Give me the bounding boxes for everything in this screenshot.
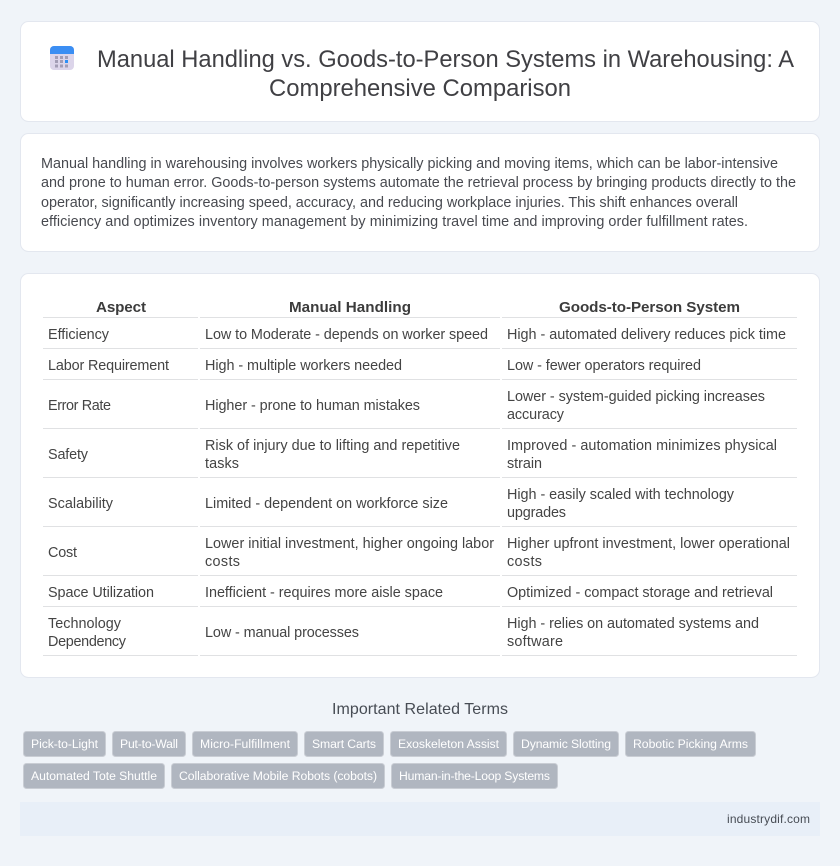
intro text: and prone to human error. Goods-to-person systems automate the retrieval process by bringing products directly to the xyxy=(41,175,796,191)
row: space utilization: Inefficient - requires more aisle space xyxy=(205,585,443,601)
row: technology dependency xyxy=(43,616,797,656)
tag: Smart Carts: Smart Carts xyxy=(312,737,376,751)
row: technology dependency: High - relies on automated systems and xyxy=(507,616,759,632)
intro text xyxy=(41,156,796,230)
tag: Exoskeleton Assist: Exoskeleton Assist xyxy=(398,737,500,751)
row: error rate: Error Rate xyxy=(48,398,111,414)
row: scalability: Limited - dependent on workforce size xyxy=(205,496,448,512)
heading: important related terms: Important Related Terms xyxy=(332,701,508,718)
title: Manual Handling vs. Goods-to-Person Systems in Warehousing: A xyxy=(97,46,794,73)
row: labor requirement: Labor Requirement xyxy=(48,358,169,374)
tag: Dynamic Slotting xyxy=(514,732,618,756)
tag: Pick-to-Light xyxy=(24,732,106,756)
row: scalability xyxy=(43,487,797,527)
row: efficiency: Low to Moderate - depends on worker speed xyxy=(205,327,488,343)
table header xyxy=(43,299,797,318)
row: safety: Improved - automation minimizes physical xyxy=(507,438,777,454)
tag: Smart Carts xyxy=(304,732,384,756)
tags: related terms xyxy=(24,732,756,788)
tag: Robotic Picking Arms xyxy=(626,732,756,756)
footer xyxy=(20,802,820,836)
row: safety: Risk of injury due to lifting and repetitive xyxy=(205,438,460,454)
row: safety: Safety xyxy=(48,447,89,463)
table header: Aspect xyxy=(96,299,146,316)
row: safety xyxy=(43,438,797,478)
row: error rate: Lower - system-guided picking increases xyxy=(507,389,765,405)
row: labor requirement: High - multiple workers needed xyxy=(205,358,402,374)
row: labor requirement xyxy=(43,358,797,380)
row: cost: Lower initial investment, higher ongoing labor xyxy=(205,536,494,552)
row: cost: costs xyxy=(507,554,542,570)
tag: Collaborative Mobile Robots (cobots): Collaborative Mobile Robots (cobots) xyxy=(179,769,377,783)
tag: Pick-to-Light: Pick-to-Light xyxy=(31,737,99,751)
intro text: efficiency and optimizes inventory management by minimizing travel time and improving order fulfillment rates. xyxy=(41,214,748,230)
row: technology dependency: Technology xyxy=(48,616,122,632)
intro text: operator, significantly increasing speed, accuracy, and reducing workplace injuries. This shift enhances overall xyxy=(41,195,738,211)
tag: Put-to-Wall xyxy=(112,732,186,756)
tag: Human-in-the-Loop Systems: Human-in-the-Loop Systems xyxy=(399,769,550,783)
tag: Dynamic Slotting: Dynamic Slotting xyxy=(521,737,611,751)
row: scalability: upgrades xyxy=(507,505,566,521)
row: cost: Higher upfront investment, lower operational xyxy=(507,536,790,552)
row: efficiency: High - automated delivery reduces pick time xyxy=(507,327,786,343)
panel: comparison table xyxy=(20,274,820,678)
table header: Manual Handling xyxy=(289,299,411,316)
row: labor requirement: Low - fewer operators required xyxy=(507,358,701,374)
row: cost: Cost xyxy=(48,545,77,561)
row: efficiency xyxy=(43,327,797,349)
panel: introduction xyxy=(20,134,820,252)
row: technology dependency: Dependency xyxy=(48,634,127,650)
row: space utilization: Optimized - compact storage and retrieval xyxy=(507,585,773,601)
tag: Exoskeleton Assist xyxy=(390,732,506,756)
row: technology dependency: software xyxy=(507,634,563,650)
tag: Micro-Fulfillment xyxy=(192,732,298,756)
row: error rate: Higher - prone to human mistakes xyxy=(205,398,420,414)
tag: Put-to-Wall: Put-to-Wall xyxy=(120,737,178,751)
panel: title card xyxy=(20,22,820,122)
tag: Robotic Picking Arms: Robotic Picking Arms xyxy=(633,737,748,751)
row: space utilization: Space Utilization xyxy=(48,585,154,601)
intro text: Manual handling in warehousing involves workers physically picking and moving items, which can be labor-intensive xyxy=(41,156,778,172)
row: error rate xyxy=(43,389,797,429)
title: Comprehensive Comparison xyxy=(269,75,571,102)
tag: Human-in-the-Loop Systems xyxy=(392,764,558,788)
row: scalability: Scalability xyxy=(48,496,114,512)
tag: Micro-Fulfillment: Micro-Fulfillment xyxy=(200,737,291,751)
table header: Goods-to-Person System xyxy=(559,299,740,316)
row: efficiency: Efficiency xyxy=(48,327,110,343)
tag: Collaborative Mobile Robots (cobots) xyxy=(172,764,384,788)
row: error rate: accuracy xyxy=(507,407,565,423)
icon: calendar xyxy=(50,46,74,70)
tag: Automated Tote Shuttle xyxy=(24,764,164,788)
footer: industrydif.com xyxy=(727,812,810,826)
title xyxy=(97,46,794,102)
row: cost xyxy=(43,536,797,576)
row: space utilization xyxy=(43,585,797,607)
row: technology dependency: Low - manual processes xyxy=(205,625,359,641)
tag: Automated Tote Shuttle: Automated Tote Shuttle xyxy=(31,769,157,783)
row: cost: costs xyxy=(205,554,240,570)
row: safety: tasks xyxy=(205,456,239,472)
row: safety: strain xyxy=(507,456,542,472)
row: scalability: High - easily scaled with technology xyxy=(507,487,735,503)
